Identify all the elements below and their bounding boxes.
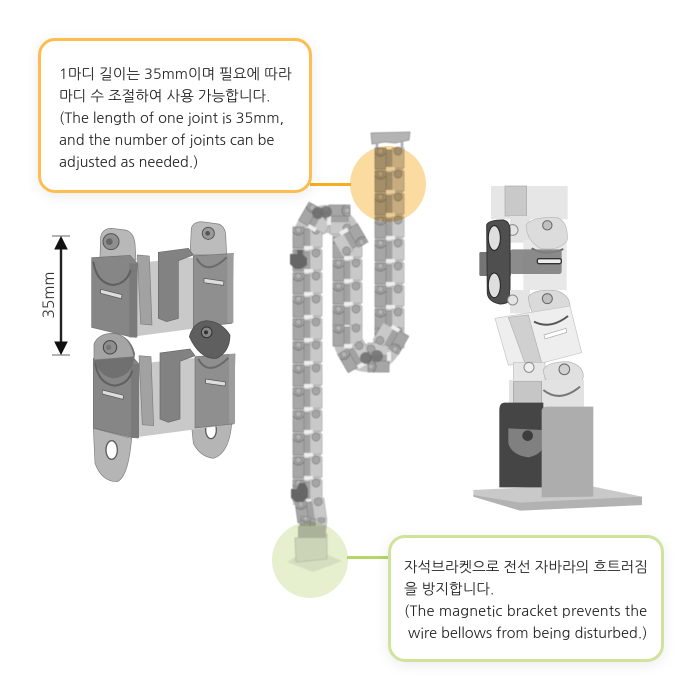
overlapping pivot left bbox=[94, 333, 135, 378]
chain: middle column bbox=[333, 236, 362, 348]
lower link in stand bbox=[509, 380, 584, 430]
highlight circle: one joint bbox=[350, 146, 426, 222]
dimension arrow: 35mm bbox=[52, 236, 70, 355]
callout text: joint length: 마디 수 조절하여 사용 가능합니다. bbox=[59, 90, 270, 104]
connector: top callout bbox=[310, 183, 351, 186]
chain: lowest tilted link bbox=[299, 515, 327, 535]
top right mounting tab bbox=[190, 222, 227, 255]
chain: side magnets bbox=[290, 250, 308, 502]
chain: left column bbox=[293, 226, 327, 525]
lower link bbox=[93, 349, 235, 438]
magnetic bracket bbox=[479, 220, 562, 304]
callout text: joint length: adjusted as needed.) bbox=[59, 156, 198, 170]
chain: top bracket bbox=[371, 132, 410, 150]
upper links bbox=[491, 186, 568, 290]
stand front plate bbox=[542, 407, 593, 497]
chain: bottom bracket bbox=[287, 526, 342, 572]
middle link pivot bbox=[508, 290, 570, 323]
callout text: magnetic bracket: wire bellows from being disturbed.) bbox=[408, 627, 647, 641]
callout text: magnetic bracket: 자석브라켓으로 전선 자바라의 흐트러짐 bbox=[404, 561, 648, 575]
top left mounting tab bbox=[100, 228, 136, 260]
callout text: magnetic bracket: 을 방지합니다. bbox=[404, 583, 494, 597]
stand assembly with magnetic bracket bbox=[473, 186, 642, 511]
chain: backing bbox=[307, 150, 389, 505]
chain bbox=[287, 132, 410, 572]
callout: magnetic bracket bbox=[388, 535, 664, 662]
stand back plate bbox=[499, 403, 543, 487]
connector: bottom callout bbox=[347, 556, 392, 559]
chain: top arch bbox=[298, 201, 368, 257]
base plate bbox=[473, 487, 642, 511]
callout text: magnetic bracket bbox=[404, 560, 648, 641]
callout text: joint length: (The length of one joint is 35mm, bbox=[59, 112, 284, 126]
overlapping pivot right bbox=[189, 321, 230, 358]
highlight circle: magnetic bracket bbox=[272, 522, 348, 598]
tilted link bbox=[495, 306, 583, 392]
joint detail: two links with 35mm span bbox=[92, 222, 235, 482]
callout: joint length bbox=[38, 38, 312, 193]
callout text: joint length bbox=[59, 67, 292, 170]
callout text: joint length: 1마디 길이는 35mm이며 필요에 따라 bbox=[59, 68, 292, 82]
chain: right column bbox=[375, 147, 404, 351]
callout text: joint length: and the number of joints can be bbox=[59, 134, 274, 148]
dimension label: 35mm: 35mm bbox=[42, 272, 57, 318]
lower link tails bbox=[93, 420, 232, 482]
callout text: magnetic bracket: (The magnetic bracket prevents the bbox=[404, 605, 647, 619]
upper link bbox=[92, 248, 233, 337]
chain: bottom U bend bbox=[337, 320, 410, 374]
